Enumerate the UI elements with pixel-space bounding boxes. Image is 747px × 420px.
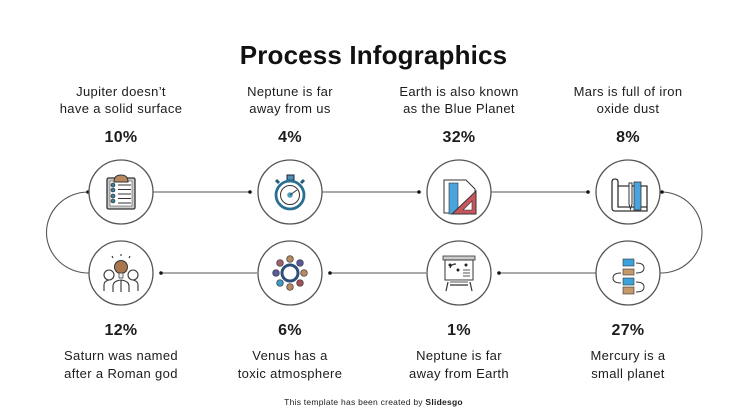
column 4 bottom text: 27% [612, 322, 644, 339]
column 1 top text: Jupiter doesn’t [76, 84, 166, 99]
column 4 top text: oxide dust [597, 101, 659, 116]
column 1 top text: 10% [105, 129, 137, 146]
column 3 top text: 32% [443, 129, 475, 146]
column 1 top text [60, 84, 182, 146]
column 1 bottom text [64, 322, 178, 381]
column 2 top text: 4% [278, 129, 302, 146]
column 1 bottom text: 12% [105, 322, 137, 339]
column 4 bottom text [590, 322, 666, 381]
column 4 bottom text: Mercury is a [590, 348, 666, 363]
column 3 bottom text: 1% [447, 322, 471, 339]
column 3 bottom text: Neptune is far [416, 348, 502, 363]
column 2 top text: away from us [249, 101, 331, 116]
column 4 top text [574, 84, 682, 146]
column 2 top text: Neptune is far [247, 84, 333, 99]
column 4 top text: Mars is full of iron [574, 84, 682, 99]
icon: presentation board [427, 241, 491, 305]
icon: clipboard [89, 160, 153, 224]
title: Process Infographics [240, 40, 507, 70]
column 1 bottom text: Saturn was named [64, 348, 178, 363]
column 3 top text [399, 84, 519, 146]
column 2 top text [247, 84, 333, 146]
column 2 bottom text: toxic atmosphere [238, 366, 342, 381]
connectors [46, 190, 702, 275]
column 1 bottom text: after a Roman god [64, 366, 178, 381]
icon: team with lightbulb [89, 241, 153, 305]
column 3 bottom text: away from Earth [409, 366, 509, 381]
column 2 bottom text: 6% [278, 322, 302, 339]
footer: This template has been created by Slidesgo [284, 397, 463, 407]
column 1 top text: have a solid surface [60, 101, 182, 116]
icon: people network [258, 241, 322, 305]
icon: ruler and set square [427, 160, 491, 224]
column 2 bottom text: Venus has a [252, 348, 328, 363]
column 3 bottom text [409, 322, 509, 381]
column 3 top text: as the Blue Planet [403, 101, 515, 116]
column 4 top text: 8% [616, 129, 640, 146]
icon: process blocks [596, 241, 660, 305]
icon: blueprint and ruler [596, 160, 660, 224]
column 4 bottom text: small planet [591, 366, 665, 381]
icon: stopwatch [258, 160, 322, 224]
column 2 bottom text [238, 322, 342, 381]
column 3 top text: Earth is also known [399, 84, 519, 99]
